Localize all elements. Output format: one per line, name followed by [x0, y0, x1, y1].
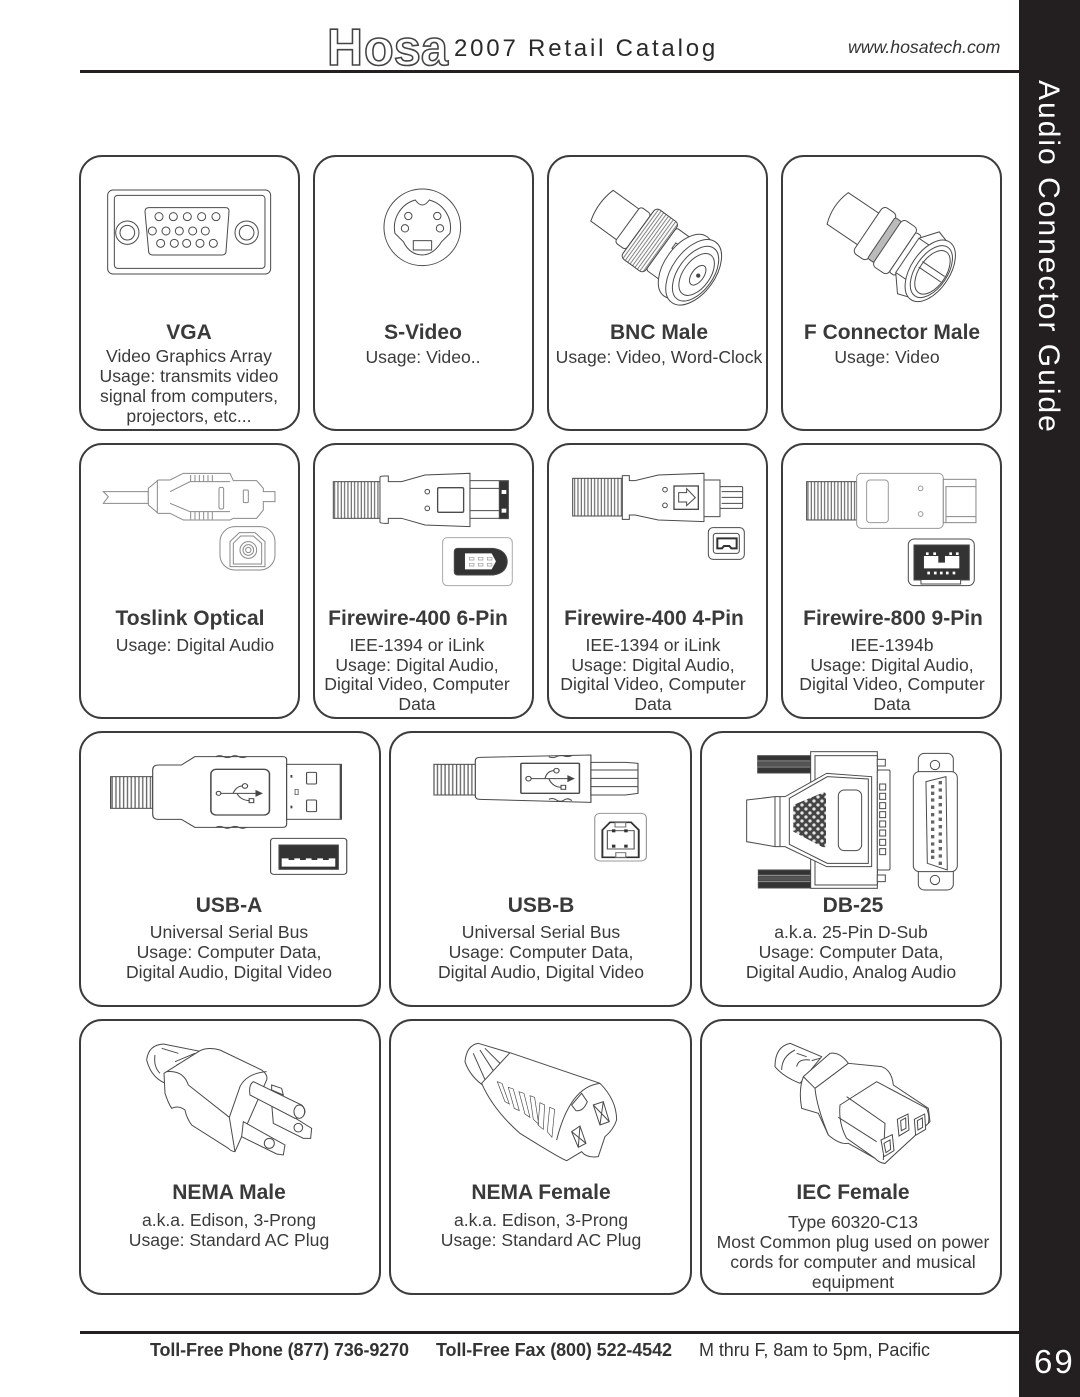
- description: BNC Male: Usage: Video, Word-Clock: [556, 347, 763, 367]
- description: USB-B: Usage: Computer Data,: [449, 942, 633, 962]
- website: www.hosatech.com: [848, 37, 1000, 57]
- description: USB-A: Usage: Computer Data,: [137, 942, 321, 962]
- catalog title: 2007 Retail Catalog: [454, 35, 718, 62]
- page number: 69: [1034, 1343, 1075, 1380]
- description: Toslink Optical: Usage: Digital Audio: [116, 635, 274, 655]
- business hours: M thru F, 8am to 5pm, Pacific: [699, 1340, 930, 1360]
- icon: S-Video connector: [384, 189, 461, 266]
- description: DB-25: Usage: Computer Data,: [759, 942, 943, 962]
- toll-free fax: Toll-Free Fax (800) 522-4542: [436, 1340, 672, 1360]
- panel: NEMA Female: [390, 1020, 691, 1294]
- panel: Firewire-400 6-Pin: [314, 444, 533, 718]
- heading: F Connector Male: F Connector Male: [804, 321, 980, 344]
- heading: BNC Male: BNC Male: [610, 321, 708, 344]
- description: Firewire-400 6-Pin: Digital Video, Computer: [324, 674, 510, 694]
- description: F Connector Male: Usage: Video: [834, 347, 940, 367]
- heading: Toslink Optical: Toslink Optical: [116, 607, 264, 630]
- heading: DB-25: DB-25: [823, 894, 884, 917]
- description: DB-25: a.k.a. 25-Pin D-Sub: [774, 922, 928, 942]
- panel: NEMA Male: [80, 1020, 380, 1294]
- panel: Toslink Optical: [80, 444, 299, 718]
- description: Firewire-400 6-Pin: Data: [398, 694, 436, 714]
- description: IEC Female: equipment: [812, 1272, 894, 1292]
- icon: Firewire 4-pin connector: [573, 473, 744, 559]
- description: USB-B: Universal Serial Bus: [462, 922, 620, 942]
- heading: NEMA Female: NEMA Female: [471, 1181, 611, 1204]
- icon: Firewire 6-pin connector: [333, 473, 512, 586]
- footer rule: [80, 1331, 1019, 1334]
- description: IEC Female: cords for computer and musical: [730, 1252, 976, 1272]
- description: Firewire-400 4-Pin: Data: [634, 694, 672, 714]
- panel: Firewire-800 9-Pin: [782, 444, 1001, 718]
- icon: DB-25 connector: [747, 752, 957, 890]
- description: VGA: signal from computers,: [100, 386, 278, 406]
- panel: USB-B: [390, 732, 691, 1006]
- description: Firewire-800 9-Pin: IEE-1394b: [850, 635, 934, 655]
- heading: VGA: VGA: [166, 321, 212, 344]
- description: NEMA Female: a.k.a. Edison, 3-Prong: [454, 1210, 628, 1230]
- icon: Toslink connector: [103, 473, 275, 570]
- description: IEC Female: Most Common plug used on power: [717, 1232, 990, 1252]
- heading: USB-B: USB-B: [508, 894, 574, 917]
- description: NEMA Male: Usage: Standard AC Plug: [129, 1230, 329, 1250]
- logo: Hosa: [327, 19, 449, 77]
- heading: Firewire-800 9-Pin: Firewire-800 9-Pin: [803, 607, 983, 630]
- panel: IEC Female: [701, 1020, 1001, 1294]
- heading: Firewire-400 6-Pin: Firewire-400 6-Pin: [328, 607, 508, 630]
- sidebar: [1019, 0, 1080, 1397]
- description: Firewire-400 6-Pin: IEE-1394 or iLink: [350, 635, 485, 655]
- heading: S-Video: S-Video: [384, 321, 462, 344]
- icon: USB-A connector: [111, 756, 347, 874]
- icon: NEMA female plug: [465, 1043, 617, 1161]
- panel: BNC Male: [548, 156, 767, 430]
- description: S-Video: Usage: Video..: [365, 347, 481, 367]
- panel: USB-A: [80, 732, 380, 1006]
- panel: Firewire-400 4-Pin: [548, 444, 767, 718]
- description: Firewire-800 9-Pin: Data: [873, 694, 911, 714]
- description: VGA: projectors, etc...: [126, 406, 252, 426]
- description: USB-A: Digital Audio, Digital Video: [126, 962, 332, 982]
- description: Firewire-800 9-Pin: Usage: Digital Audio,: [810, 655, 974, 675]
- icon: IEC female plug: [775, 1043, 930, 1163]
- description: VGA: Video Graphics Array: [106, 346, 272, 366]
- panel: VGA: [80, 156, 299, 430]
- icon: NEMA male plug: [147, 1044, 312, 1155]
- description: Firewire-800 9-Pin: Digital Video, Computer: [799, 674, 985, 694]
- icon: VGA connector: [108, 190, 271, 274]
- icon: BNC connector: [578, 174, 733, 315]
- heading: IEC Female: IEC Female: [796, 1181, 910, 1204]
- description: Firewire-400 4-Pin: Digital Video, Computer: [560, 674, 746, 694]
- description: USB-A: Universal Serial Bus: [150, 922, 308, 942]
- heading: USB-A: USB-A: [196, 894, 262, 917]
- description: NEMA Male: a.k.a. Edison, 3-Prong: [142, 1210, 316, 1230]
- heading: NEMA Male: NEMA Male: [172, 1181, 286, 1204]
- icon: F connector: [814, 176, 967, 313]
- logo: Hosa: osa: [364, 20, 449, 76]
- icon: USB-B connector: [434, 755, 646, 861]
- header rule: [80, 70, 1019, 73]
- footer: [80, 1331, 1019, 1360]
- description: Firewire-400 4-Pin: IEE-1394 or iLink: [586, 635, 721, 655]
- panel: S-Video: [314, 156, 533, 430]
- heading: Firewire-400 4-Pin: Firewire-400 4-Pin: [564, 607, 744, 630]
- header: [80, 19, 1019, 77]
- sidebar title: Audio Connector Guide: [1032, 80, 1065, 434]
- description: IEC Female: Type 60320-C13: [788, 1212, 918, 1232]
- description: Firewire-400 6-Pin: Usage: Digital Audio,: [335, 655, 499, 675]
- description: VGA: Usage: transmits video: [100, 366, 279, 386]
- panel: F Connector Male: [782, 156, 1001, 430]
- description: NEMA Female: Usage: Standard AC Plug: [441, 1230, 641, 1250]
- logo: Hosa: H: [327, 19, 363, 77]
- description: Firewire-400 4-Pin: Usage: Digital Audio,: [571, 655, 735, 675]
- panel: DB-25: [701, 732, 1001, 1006]
- icon: Firewire 9-pin connector: [807, 473, 976, 586]
- description: DB-25: Digital Audio, Analog Audio: [746, 962, 956, 982]
- description: USB-B: Digital Audio, Digital Video: [438, 962, 644, 982]
- toll-free phone: Toll-Free Phone (877) 736-9270: [150, 1340, 409, 1360]
